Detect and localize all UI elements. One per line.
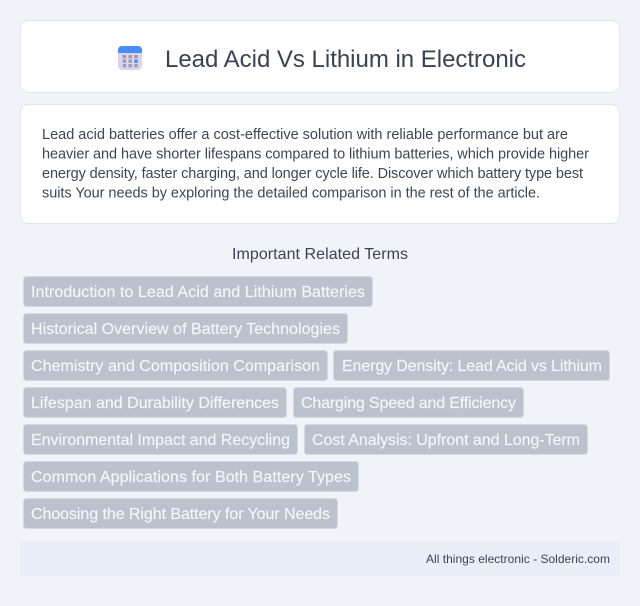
header panel xyxy=(20,20,620,92)
tag: cost xyxy=(304,424,588,454)
tag: lifespan xyxy=(24,388,286,418)
text block: introduction paragraph xyxy=(42,127,589,202)
tag: historical overview xyxy=(24,314,348,344)
tag: cost: Cost Analysis: Upfront and Long-Term xyxy=(312,432,580,449)
footer bar xyxy=(20,542,620,576)
tag: chemistry: Chemistry and Composition Comparison xyxy=(31,358,320,375)
title: Lead Acid Vs Lithium in Electronic xyxy=(165,46,526,73)
text block: introduction paragraph: suits Your needs by exploring the detailed comparison in the rest of the article. xyxy=(42,186,540,202)
tag: energy density: Energy Density: Lead Acid vs Lithium xyxy=(342,358,602,375)
tag: introduction: Introduction to Lead Acid and Lithium Batteries xyxy=(31,284,365,301)
tag: environmental: Environmental Impact and Recycling xyxy=(31,432,290,449)
heading: important related terms: Important Related Terms xyxy=(232,246,408,263)
tag: applications xyxy=(24,462,358,492)
text block: introduction paragraph: Lead acid batteries offer a cost-effective solution with reliable performance but are xyxy=(42,127,568,143)
text block: introduction paragraph: energy density, faster charging, and longer cycle life. Discover which battery type best xyxy=(42,166,583,182)
tag: choosing: Choosing the Right Battery for Your Needs xyxy=(31,506,330,523)
panel: introduction xyxy=(20,104,620,224)
text block: introduction paragraph: heavier and have shorter lifespans compared to lithium batteries, which provide higher xyxy=(42,146,589,162)
tag: chemistry xyxy=(24,350,328,380)
tag list xyxy=(24,276,610,528)
tag: introduction xyxy=(24,276,372,306)
tag: applications: Common Applications for Both Battery Types xyxy=(31,469,351,486)
icon: calendar xyxy=(118,46,142,70)
tag: charging xyxy=(294,388,524,418)
tag: historical overview: Historical Overview of Battery Technologies xyxy=(31,321,340,338)
footer credit: All things electronic - Solderic.com xyxy=(426,552,610,566)
tag: choosing xyxy=(24,498,338,528)
tag: energy density xyxy=(334,350,610,380)
tag: lifespan: Lifespan and Durability Differences xyxy=(31,395,279,412)
tag: charging: Charging Speed and Efficiency xyxy=(301,395,516,412)
tag: environmental xyxy=(24,424,298,454)
